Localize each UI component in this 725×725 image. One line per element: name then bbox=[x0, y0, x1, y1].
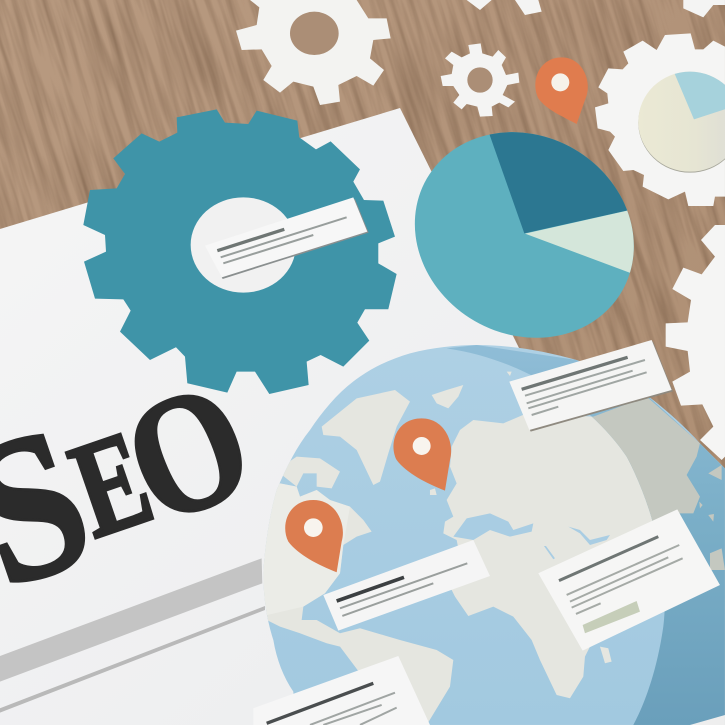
note card middle bbox=[323, 540, 490, 631]
grey placeholder bars bbox=[0, 558, 265, 713]
pale north america haze bbox=[260, 483, 350, 617]
land masses bbox=[260, 372, 725, 725]
bottom right paper corner bbox=[690, 715, 725, 725]
world globe bbox=[253, 340, 725, 725]
big teal gear bbox=[83, 109, 397, 394]
note card top right bbox=[509, 340, 673, 432]
SEO heading bbox=[0, 344, 275, 632]
pie chart bbox=[414, 132, 634, 338]
orange map pin centre bbox=[394, 418, 451, 491]
note card bottom bbox=[253, 656, 430, 725]
darker crescent bbox=[447, 345, 725, 725]
pale pie disc bbox=[638, 67, 725, 173]
seas bbox=[453, 513, 610, 559]
SEO heading: O bbox=[101, 344, 275, 561]
white gear far right bbox=[666, 225, 725, 460]
white gear right with pale disc bbox=[595, 33, 725, 206]
top cut-off gear pieces bbox=[467, 0, 725, 17]
note card on gear bbox=[205, 197, 369, 279]
orange map pin top bbox=[535, 57, 588, 124]
note card right bbox=[538, 509, 720, 651]
small white gear bbox=[441, 43, 519, 117]
SEO heading: E bbox=[54, 402, 169, 567]
orange map pin left bbox=[285, 500, 343, 572]
white paper gear top bbox=[236, 0, 391, 105]
